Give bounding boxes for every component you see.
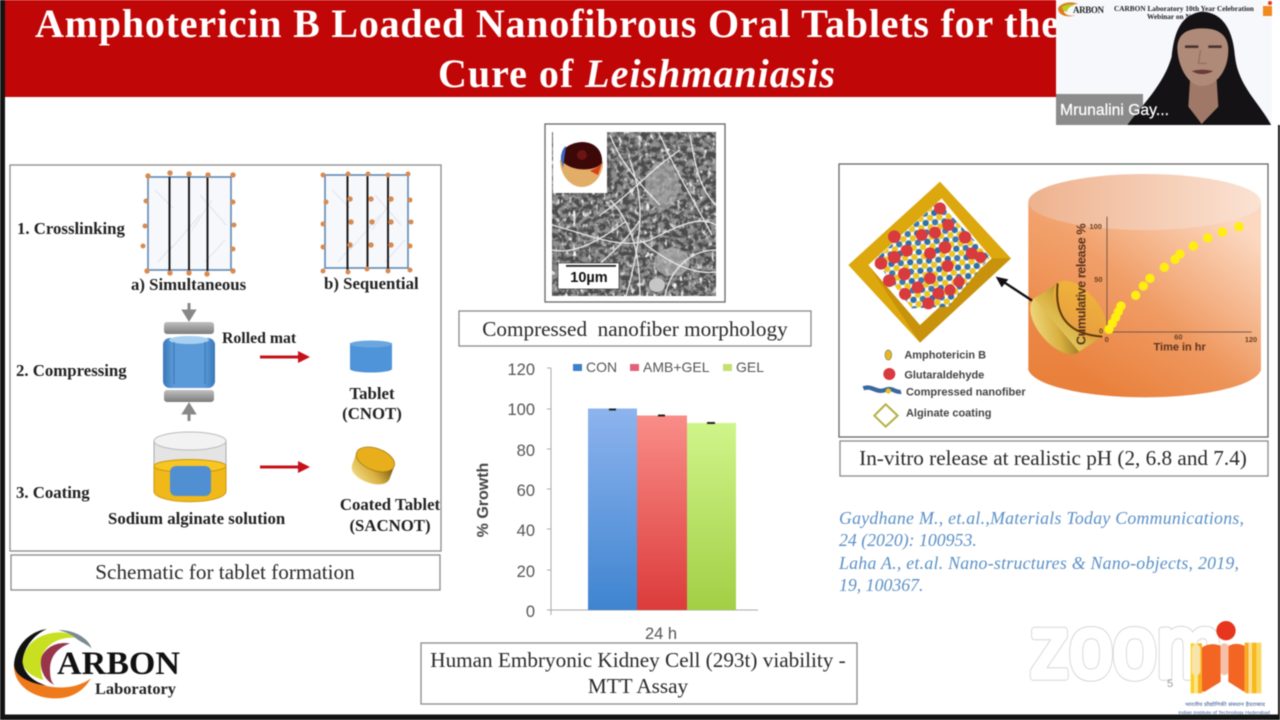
caption: morphology xyxy=(459,311,811,346)
legend: GEL xyxy=(736,359,764,375)
panel: in-vitro release xyxy=(839,164,1268,437)
caption: viability assay: MTT Assay xyxy=(588,674,689,698)
axis values: 0 xyxy=(1105,335,1109,344)
double arrow xyxy=(996,277,1042,307)
y axis labels: 60 xyxy=(517,482,535,500)
scale bar: 10µm xyxy=(570,270,608,286)
institute name: भारतीय प्रौद्योगिकी संस्थान हैदराबाद xyxy=(1185,701,1265,708)
diagram: simultaneous crosslinking xyxy=(140,170,236,277)
webcam slide heading: Webinar on N xyxy=(1147,12,1191,21)
webcam inset xyxy=(1056,0,1277,126)
logo wordmark: ARBON xyxy=(57,646,180,682)
slide number: 5 xyxy=(1167,678,1173,690)
y axis labels: 120 xyxy=(507,361,535,379)
book stripes xyxy=(1191,643,1261,693)
label: tablet CNOT: (CNOT) xyxy=(342,404,402,423)
y axis title: Cumulative release % xyxy=(1075,223,1089,345)
logo swoosh xyxy=(14,629,92,698)
bar chart: cell viability xyxy=(475,359,764,643)
caption: morphology: Compressed nanofiber morphology xyxy=(482,317,788,341)
step label: crosslinking: 1. Crosslinking xyxy=(17,219,125,238)
name tag bar xyxy=(1056,94,1143,125)
label: simultaneous: a) Simultaneous xyxy=(131,275,247,294)
panel: tablet formation schematic xyxy=(10,165,441,551)
webcam slide logo: ARBON xyxy=(1073,5,1104,15)
diagram: press with rolled mat xyxy=(163,303,215,421)
title text: Amphotericin B Loaded Nanofibrous Oral Tablets for the xyxy=(35,1,1059,46)
error bars xyxy=(609,410,715,423)
references: 19, 100367. xyxy=(839,575,923,595)
release curve dots xyxy=(1104,222,1244,334)
step label: compressing: 2. Compressing xyxy=(16,361,127,380)
axis values: 50 xyxy=(1094,275,1102,284)
watermark: zoom: zoom xyxy=(1030,597,1222,696)
red dot xyxy=(1216,621,1236,640)
arrow: beaker to coated tablet xyxy=(260,461,310,473)
inset: tablet photo xyxy=(553,132,607,193)
bar: CON xyxy=(588,408,637,610)
x axis title: Time in hr xyxy=(1154,342,1207,354)
institute name: Indian Institute of Technology Hyderabad xyxy=(1178,710,1270,716)
diagram: sequential crosslinking xyxy=(320,172,414,274)
diamond composite: nanofibers and drug xyxy=(848,182,1011,343)
webcam slide heading: CARBON Laboratory 10th Year Celebration xyxy=(1114,4,1254,13)
release chart on cylinder xyxy=(1075,217,1257,354)
icon: blue tablet xyxy=(350,340,392,372)
legend: AMB+GEL xyxy=(643,359,710,375)
diagram: beaker of sodium alginate xyxy=(154,432,226,502)
caption: release conditions xyxy=(840,441,1268,476)
watermark: zoom: zoom xyxy=(1030,597,1222,696)
scale bar xyxy=(558,263,619,289)
title text xyxy=(35,1,1059,96)
bar: GEL xyxy=(687,423,736,610)
legend: Compressed nanofiber xyxy=(906,387,1026,399)
label: tablet CNOT: Tablet xyxy=(349,384,395,403)
label: rolled mat: Rolled mat xyxy=(222,330,297,347)
name tag text: Mrunalini Gay... xyxy=(1060,102,1169,119)
label: sequential: b) Sequential xyxy=(324,274,419,293)
label: coated tablet SACNOT: (SACNOT) xyxy=(349,516,431,535)
panel: SEM micrograph xyxy=(545,124,725,302)
institute name xyxy=(1178,701,1270,716)
bar: AMB+GEL xyxy=(637,416,687,610)
legend: Glutaraldehyde xyxy=(904,369,984,381)
logo subtitle: Laboratory xyxy=(95,681,176,698)
axis values: 0 xyxy=(1099,326,1103,335)
webcam slide emblem xyxy=(1262,0,1273,17)
cylinder xyxy=(1028,174,1261,397)
legend: Amphotericin B xyxy=(904,349,986,361)
presenter xyxy=(1127,12,1272,126)
references xyxy=(838,508,1244,595)
axes xyxy=(547,368,758,615)
title band xyxy=(5,0,1059,97)
y axis title: % Growth xyxy=(475,463,492,537)
legend: Alginate coating xyxy=(906,408,991,420)
legend xyxy=(573,359,764,375)
references: 24 (2020): 100953. xyxy=(839,530,977,551)
step label: coating: 3. Coating xyxy=(16,483,90,502)
references: Laha A., et.al. Nano-structures & Nano-objects, 2019, xyxy=(838,553,1239,573)
caption: viability assay xyxy=(421,643,857,704)
legend: CON xyxy=(586,359,617,375)
y axis labels xyxy=(507,361,535,621)
label: coated tablet SACNOT: Coated Tablet xyxy=(340,495,441,514)
axis values xyxy=(1090,222,1257,344)
SEM image xyxy=(552,132,716,296)
caption: viability assay: Human Embryonic Kidney Cell (293t) viability - xyxy=(430,648,846,672)
title text: Cure of Leishmaniasis xyxy=(438,51,835,96)
coated tablet in cylinder xyxy=(1020,271,1117,364)
y axis labels: 0 xyxy=(526,603,535,621)
axis values: 100 xyxy=(1090,222,1102,231)
webcam slide logo xyxy=(1058,2,1104,16)
y axis labels: 80 xyxy=(517,442,535,460)
legend xyxy=(863,349,1026,427)
axis values: 60 xyxy=(1174,332,1182,341)
caption: schematic xyxy=(11,555,440,590)
x axis label: 24 h xyxy=(645,625,677,643)
y axis labels: 20 xyxy=(517,563,535,581)
axis values: 120 xyxy=(1245,335,1257,344)
arrow: press to tablet xyxy=(260,351,310,363)
icon: coated tablet xyxy=(348,442,398,489)
references: Gaydhane M., et.al.,Materials Today Communications, xyxy=(839,508,1244,528)
caption: schematic: Schematic for tablet formation xyxy=(95,560,355,584)
y axis labels: 40 xyxy=(517,522,535,540)
caption: release conditions: In-vitro release at realistic pH (2, 6.8 and 7.4) xyxy=(859,446,1247,470)
label: sodium alginate solution: Sodium alginate solution xyxy=(108,509,286,528)
y axis labels: 100 xyxy=(507,401,535,419)
logo: CARBON Laboratory xyxy=(14,629,180,698)
logo: institute xyxy=(1178,621,1270,716)
